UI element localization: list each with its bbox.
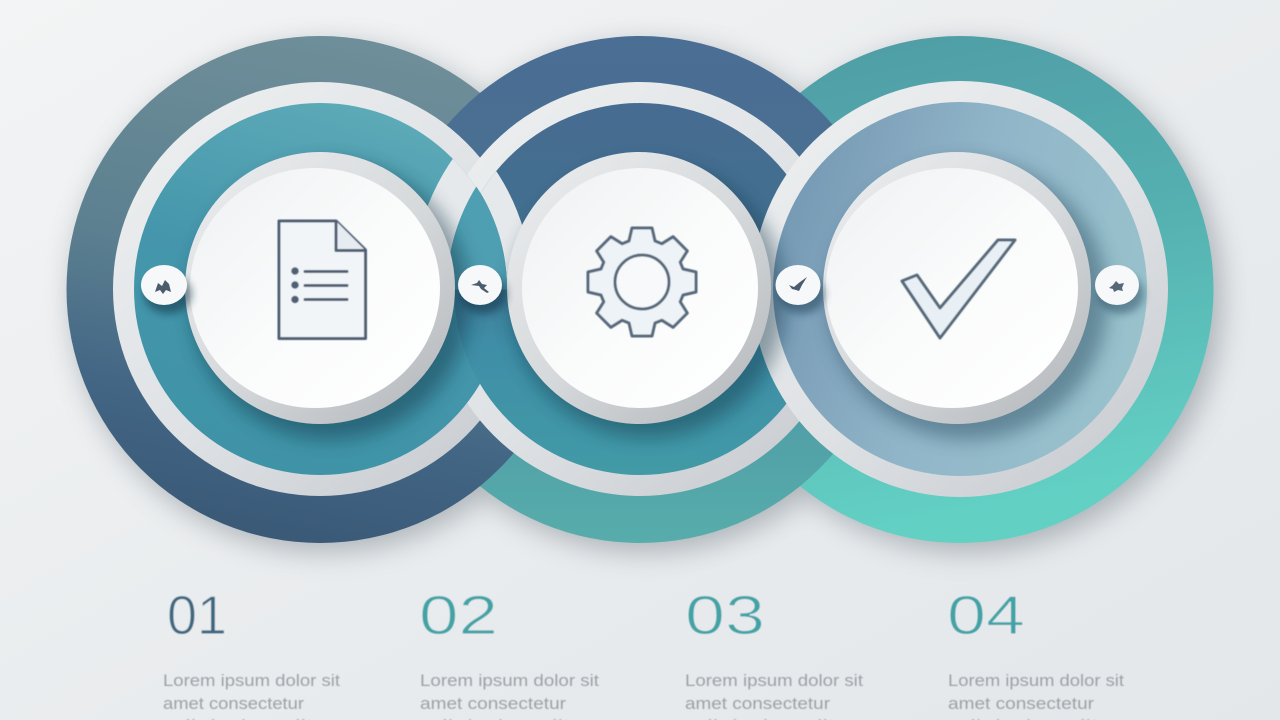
connector node 4 xyxy=(1095,265,1144,314)
step 01 label: amet consectetur xyxy=(163,694,304,713)
step 03 label: Lorem ipsum dolor sit xyxy=(685,671,863,690)
step 03 label: 03 xyxy=(685,584,765,646)
panel: step 2 disc xyxy=(507,152,786,438)
icon: gear xyxy=(588,228,696,336)
panel: step 3 disc xyxy=(823,152,1108,440)
step 03 label: amet consectetur xyxy=(685,694,830,713)
step 02 label xyxy=(419,584,599,720)
step 02 label: Lorem ipsum dolor sit xyxy=(420,671,599,690)
connector node 3 xyxy=(776,265,825,314)
panel: step 1 disc xyxy=(185,152,470,440)
connector node 1 xyxy=(141,265,192,314)
step 02 label: amet consectetur xyxy=(420,694,566,713)
icon: document with list xyxy=(279,221,366,338)
step 04 label: Lorem ipsum dolor sit xyxy=(948,671,1124,690)
step 01 label xyxy=(163,584,340,720)
step 04 label xyxy=(947,584,1124,720)
inner coloured ring for step three xyxy=(752,81,1168,497)
step 03 label xyxy=(685,584,863,720)
icon: check mark xyxy=(902,240,1015,338)
step 02 label: 02 xyxy=(419,584,498,646)
step 01 label: 01 xyxy=(167,584,227,646)
step 04 label: amet consectetur xyxy=(948,694,1094,713)
connector node 2 xyxy=(458,265,507,314)
inner coloured rings for steps one and two xyxy=(113,78,850,500)
overlapping outer rings xyxy=(66,36,1214,543)
step 04 label: 04 xyxy=(947,584,1025,646)
drop shadow under rings xyxy=(72,44,1222,552)
step 01 label: Lorem ipsum dolor sit xyxy=(163,671,340,690)
